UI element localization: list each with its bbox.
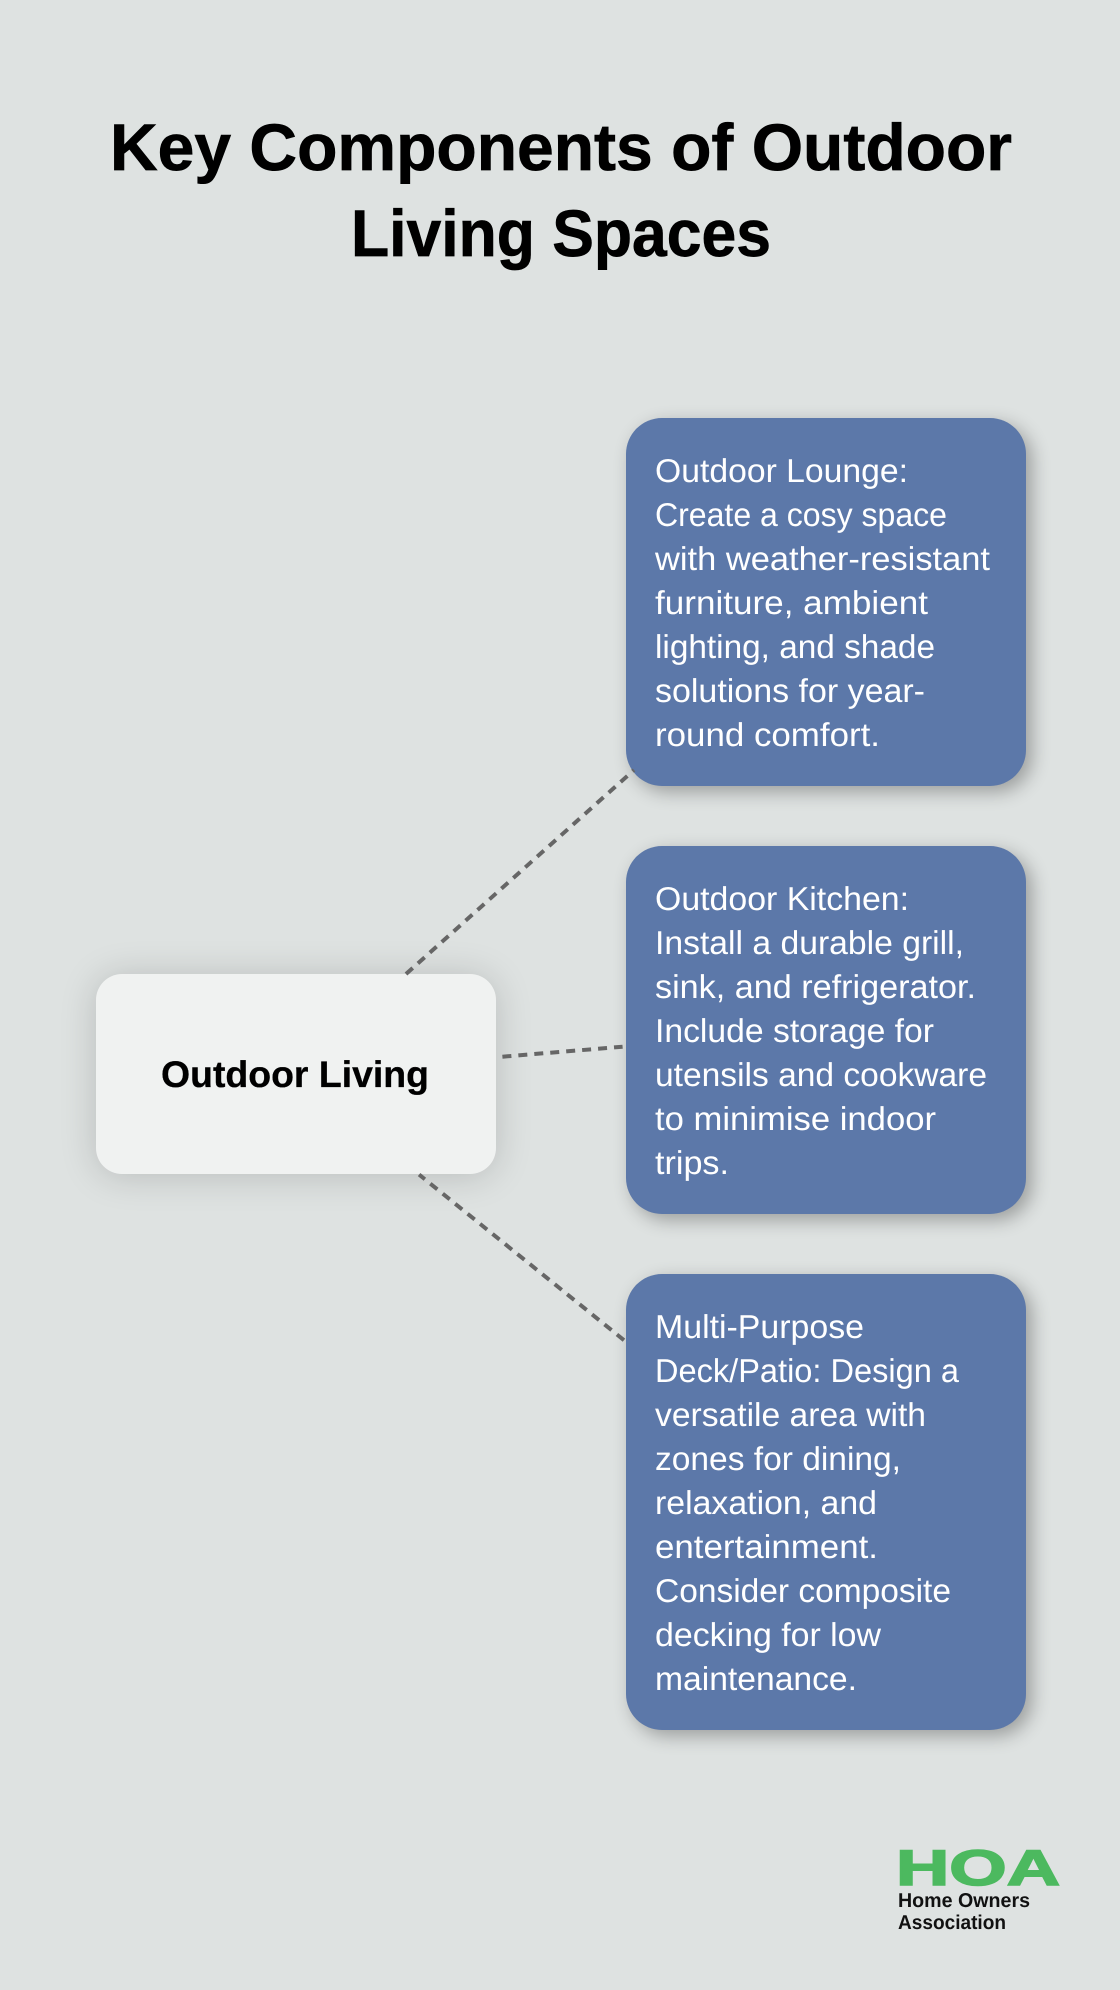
panel: Multi-Purpose Deck/Patio: maintenance. <box>655 1660 857 1697</box>
panel: Outdoor Kitchen: utensils and cookware <box>655 1056 987 1093</box>
panel: Outdoor Lounge: with weather-resistant <box>654 540 990 577</box>
panel: Outdoor Kitchen: Include storage for <box>655 1012 934 1049</box>
title: Living Spaces <box>351 196 771 270</box>
panel: Multi-Purpose Deck/Patio: Consider composite <box>655 1572 951 1609</box>
panel: Multi-Purpose Deck/Patio: relaxation, and <box>655 1484 877 1521</box>
panel: Outdoor Kitchen: trips. <box>655 1144 729 1181</box>
panel: Outdoor Kitchen: Outdoor Kitchen: <box>655 880 909 917</box>
panel: Outdoor Lounge: Outdoor Lounge: <box>655 452 908 489</box>
central node: Outdoor Living <box>96 974 496 1174</box>
panel: Multi-Purpose Deck/Patio: zones for dining, <box>655 1440 901 1477</box>
panel: Outdoor Kitchen: to minimise indoor <box>655 1100 936 1137</box>
panel: Multi-Purpose Deck/Patio: Deck/Patio: Design a <box>655 1352 960 1389</box>
title <box>110 110 1012 270</box>
panel: Outdoor Kitchen: Install a durable grill, <box>655 924 964 961</box>
logo: HOA Home Owners Association: Home Owners <box>898 1890 1030 1912</box>
central node: Outdoor Living: Outdoor Living <box>161 1054 429 1095</box>
panel: Outdoor Kitchen <box>626 846 1026 1214</box>
panel: Outdoor Kitchen: sink, and refrigerator. <box>655 968 976 1005</box>
panel: Outdoor Lounge: furniture, ambient <box>655 584 928 621</box>
title: Key Components of Outdoor <box>110 110 1012 184</box>
panel: Multi-Purpose Deck/Patio: Multi-Purpose <box>655 1308 864 1345</box>
logo: HOA Home Owners Association: Association <box>898 1912 1006 1934</box>
panel: Outdoor Lounge: solutions for year- <box>655 672 925 709</box>
panel: Outdoor Lounge <box>626 418 1026 786</box>
panel: Multi-Purpose Deck/Patio: versatile area with <box>655 1396 926 1433</box>
panel: Multi-Purpose Deck/Patio <box>626 1274 1026 1730</box>
panel: Multi-Purpose Deck/Patio: entertainment. <box>655 1528 878 1565</box>
panel: Outdoor Lounge: round comfort. <box>655 716 880 753</box>
panel: Multi-Purpose Deck/Patio: decking for low <box>655 1616 881 1653</box>
panel: Outdoor Lounge: lighting, and shade <box>655 628 935 665</box>
logo: HOA Home Owners Association: HOA <box>896 1840 1060 1896</box>
panel: Outdoor Lounge: Create a cosy space <box>655 496 947 533</box>
